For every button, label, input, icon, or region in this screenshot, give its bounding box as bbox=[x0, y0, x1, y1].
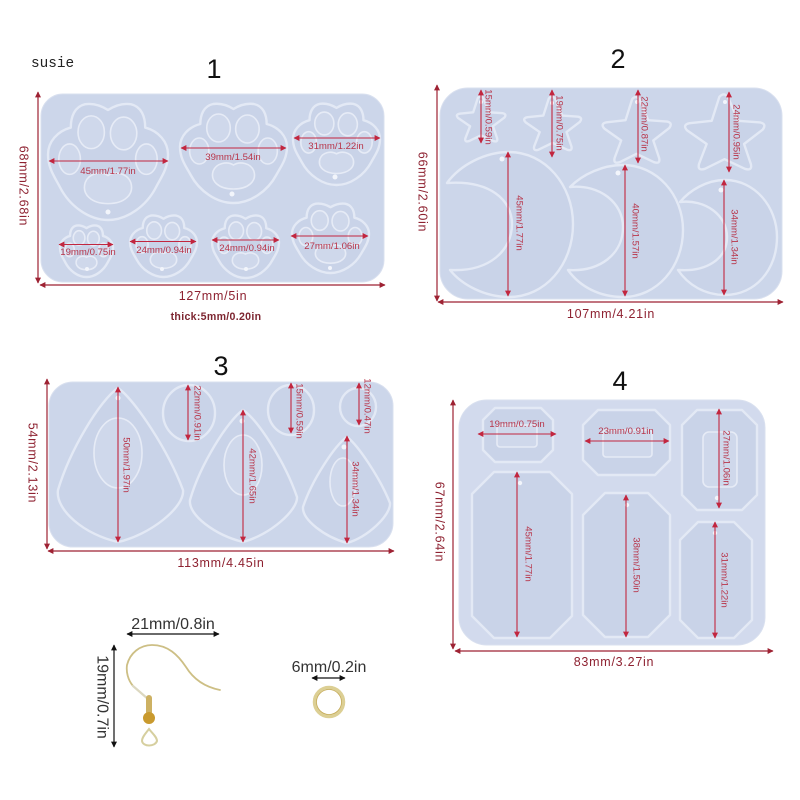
measure: moon 34mm: 34mm/1.34in bbox=[729, 209, 740, 265]
moon: 34mm bbox=[678, 180, 777, 295]
measure: 27mm bbox=[291, 236, 368, 252]
measure: 19mm: 19mm/0.75in bbox=[60, 247, 116, 258]
paw: large bbox=[48, 104, 168, 220]
measure: 27mm: 27mm/1.06in bbox=[304, 241, 360, 252]
pick inset: 50mm bbox=[94, 418, 142, 488]
paw: 39mm bbox=[180, 104, 287, 203]
octagon: 38mm bbox=[583, 493, 670, 637]
measure: 24mm right bbox=[212, 240, 279, 254]
star: 22mm bbox=[603, 97, 671, 163]
measure: 24mm right: 24mm/0.94in bbox=[219, 243, 275, 254]
earring hook height label bbox=[93, 645, 114, 747]
measure: star 24mm: 24mm/0.95in bbox=[731, 104, 742, 160]
circle: 12mm bbox=[340, 388, 376, 426]
width dimension: panel 3: 113mm/4.45in bbox=[177, 556, 265, 570]
measure: octagon 27mm bbox=[719, 409, 732, 508]
measure: star 24mm bbox=[729, 92, 742, 172]
hanging holes bbox=[479, 100, 727, 192]
measure: star 22mm: 22mm/0.87in bbox=[639, 96, 650, 152]
pick: 50mm bbox=[58, 388, 183, 542]
heading: 1: 1 bbox=[206, 54, 222, 84]
measure: octagon 31mm bbox=[715, 522, 730, 638]
measure: pick 34mm bbox=[347, 436, 361, 543]
height dimension: panel 4: 67mm/2.64in bbox=[433, 482, 447, 562]
measure: moon 34mm bbox=[724, 180, 740, 295]
circle: 15mm bbox=[268, 385, 314, 435]
measure: octagon 19mm: 19mm/0.75in bbox=[489, 419, 545, 430]
panel 3: guitar pick mold bbox=[49, 382, 393, 547]
measure: octagon 23mm: 23mm/0.91in bbox=[598, 426, 654, 437]
octagon: 31mm bbox=[680, 522, 752, 638]
height dimension: panel 3: 54mm/2.13in bbox=[26, 423, 40, 503]
heading: 4: 4 bbox=[612, 366, 628, 396]
heading: 3: 3 bbox=[213, 351, 229, 381]
height dimension: panel 1: 68mm/2.68in bbox=[17, 146, 31, 226]
measure: pick 42mm bbox=[243, 410, 258, 542]
measure: octagon 19mm bbox=[478, 419, 556, 434]
icon: gold jump ring bbox=[314, 688, 344, 716]
measure: moon 40mm: 40mm/1.57in bbox=[630, 203, 641, 259]
measure: moon 45mm: 45mm/1.77in bbox=[514, 195, 525, 251]
hanging holes bbox=[85, 174, 338, 271]
thickness note: thick:5mm/0.20in bbox=[171, 311, 261, 323]
measure: circle 15mm: 15mm/0.59in bbox=[294, 383, 305, 439]
octagon: 23mm bbox=[583, 410, 670, 475]
measure: octagon 23mm bbox=[585, 426, 669, 441]
paw: 24mm right bbox=[212, 215, 279, 278]
octagon: 45mm bbox=[472, 472, 572, 638]
paw: 27mm bbox=[292, 204, 369, 273]
earring hook width label: 21mm/0.8in bbox=[131, 616, 215, 633]
measure: pick 50mm: 50mm/1.97in bbox=[121, 437, 132, 493]
icon: gold earring hook bbox=[127, 645, 220, 746]
octagon: 19mm bbox=[483, 408, 553, 462]
width dimension: panel 4: 83mm/3.27in bbox=[574, 655, 654, 669]
measure: octagon 27mm: 27mm/1.06in bbox=[721, 430, 732, 486]
pick inset: 34mm bbox=[330, 458, 356, 506]
earring hook height label: 19mm/0.7in bbox=[93, 655, 110, 739]
moon: 45mm bbox=[447, 152, 573, 297]
pick: 42mm bbox=[190, 410, 297, 542]
measure: 39mm: 39mm/1.54in bbox=[205, 152, 261, 163]
star: 24mm bbox=[685, 94, 764, 169]
measure: octagon 31mm: 31mm/1.22in bbox=[719, 552, 730, 608]
panel 4: octagon mold bbox=[459, 400, 765, 645]
pick inset: 42mm bbox=[224, 435, 262, 495]
octagon inset: 23mm bbox=[603, 430, 652, 457]
watermark: susie: susie bbox=[31, 56, 74, 72]
hanging holes bbox=[518, 481, 719, 535]
width dimension: panel 1: 127mm/5in bbox=[179, 289, 247, 303]
star: 19mm bbox=[524, 97, 581, 150]
measure: octagon 45mm: 45mm/1.77in bbox=[523, 526, 534, 582]
panel 1: paw mold bbox=[41, 94, 384, 282]
paw: 24mm left bbox=[130, 215, 197, 277]
circle: 22mm bbox=[163, 385, 215, 441]
width dimension: panel 2: 107mm/4.21in bbox=[567, 307, 655, 321]
moon: 40mm bbox=[568, 165, 683, 297]
measure: pick 42mm: 42mm/1.65in bbox=[247, 448, 258, 504]
measure: 31mm bbox=[294, 138, 380, 152]
measure: 45mm: 45mm/1.77in bbox=[80, 166, 136, 177]
height dimension: panel 2: 66mm/2.60in bbox=[416, 152, 430, 232]
heading: 2: 2 bbox=[610, 44, 626, 74]
paw: 19mm bbox=[60, 225, 113, 277]
measure: circle 22mm: 22mm/0.91in bbox=[192, 385, 203, 441]
measure: 24mm left: 24mm/0.94in bbox=[136, 245, 192, 256]
panel 2: star and moon mold bbox=[440, 88, 782, 299]
measure: octagon 38mm: 38mm/1.50in bbox=[631, 537, 642, 593]
measure: pick 34mm: 34mm/1.34in bbox=[350, 461, 361, 517]
pick: 34mm bbox=[303, 437, 390, 543]
measure: 31mm: 31mm/1.22in bbox=[308, 141, 364, 152]
measure: star 15mm: 15mm/0.59in bbox=[483, 89, 494, 145]
measure: circle 12mm: 12mm/0.47in bbox=[362, 378, 373, 434]
octagon inset: 27mm bbox=[703, 432, 737, 487]
hanging holes bbox=[116, 396, 346, 450]
paw: 31mm bbox=[293, 104, 380, 185]
octagon inset: 19mm bbox=[497, 425, 537, 447]
measure: 24mm left bbox=[130, 242, 196, 256]
measure: 39mm bbox=[181, 148, 286, 163]
measure: 45mm bbox=[49, 161, 168, 177]
measure: moon 40mm bbox=[625, 165, 641, 296]
measure: star 19mm: 19mm/0.75in bbox=[554, 95, 565, 151]
octagon: 27mm bbox=[682, 410, 757, 510]
jump ring width label: 6mm/0.2in bbox=[292, 659, 366, 676]
star: 15mm bbox=[457, 96, 505, 141]
